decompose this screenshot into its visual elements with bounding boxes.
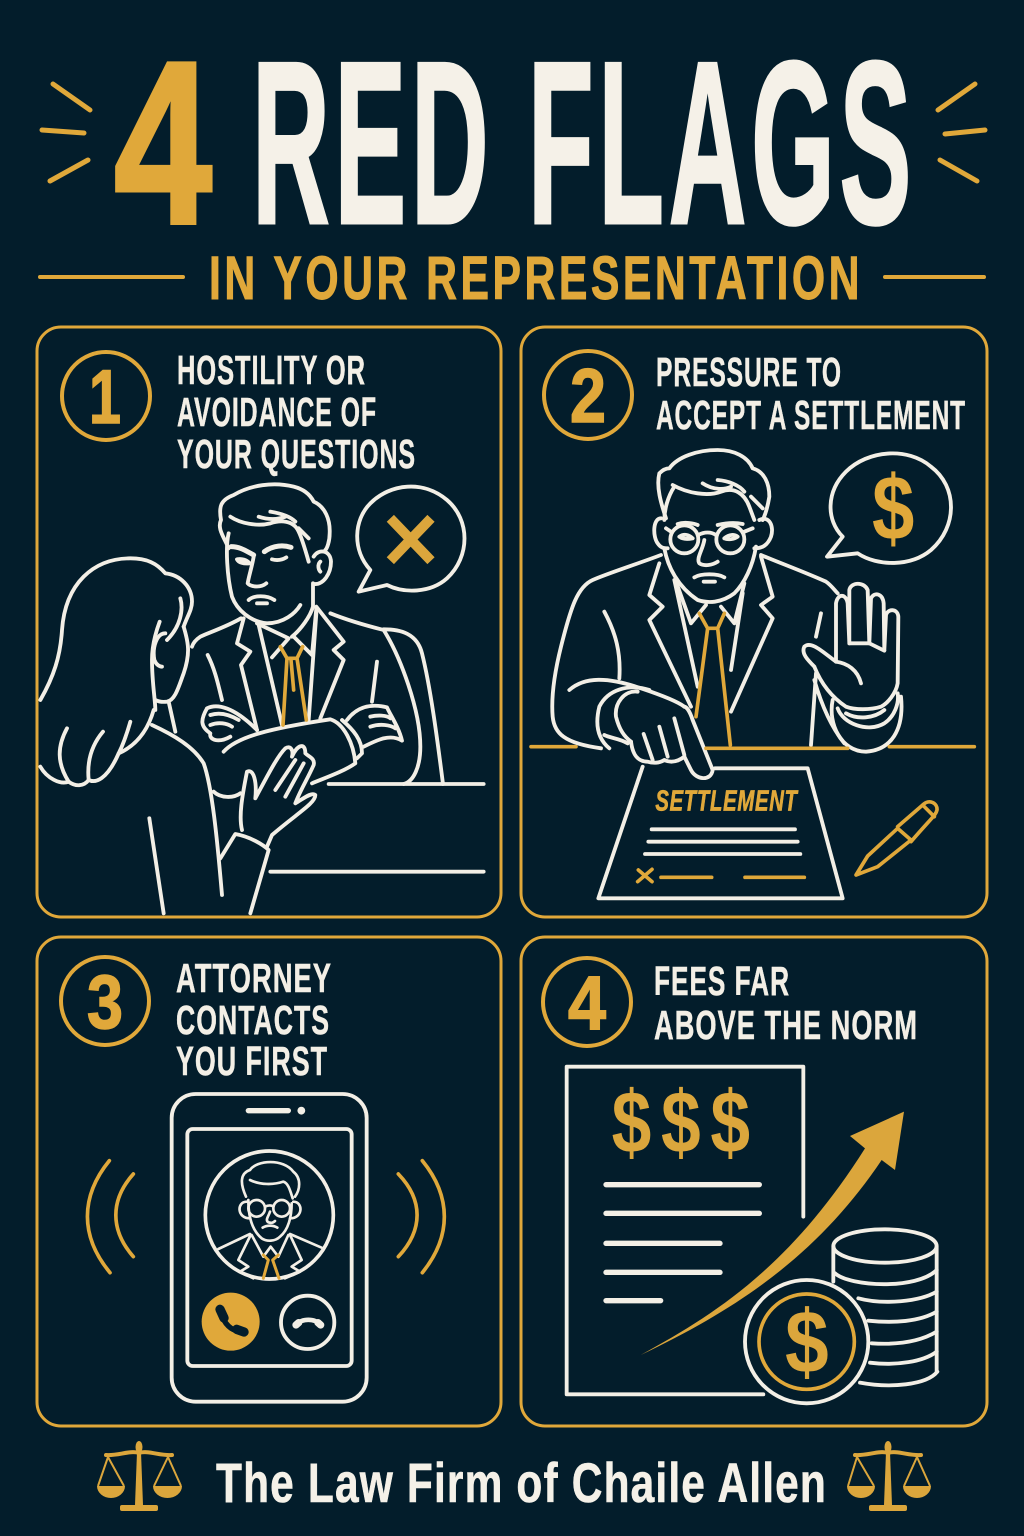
- number badge 3: [61, 957, 149, 1045]
- heading 2: [656, 349, 966, 438]
- number badge 2: [544, 351, 632, 439]
- heading 3: YOU FIRST: [176, 1038, 328, 1084]
- number badge 3: 3: [87, 960, 123, 1045]
- heading 3: CONTACTS: [176, 997, 330, 1043]
- speech bubble with X: [357, 487, 464, 592]
- caller portrait: [205, 1151, 333, 1279]
- coin: $: [785, 1291, 829, 1391]
- illustration: attorney and client: [40, 484, 484, 913]
- answer button: [202, 1293, 260, 1351]
- heading 4: [654, 958, 918, 1048]
- icon: pen: [856, 802, 937, 875]
- attorney figure: [192, 484, 484, 872]
- heading 3: [176, 955, 332, 1084]
- invoice document: $: [710, 1072, 750, 1171]
- number badge 4: 4: [568, 961, 606, 1046]
- decline button: [281, 1296, 334, 1349]
- number badge 1: 1: [89, 355, 121, 440]
- settlement document: SETTLEMENT: [655, 786, 799, 818]
- panel: fees far above the norm: [521, 937, 987, 1426]
- heading 4: FEES FAR: [654, 958, 790, 1004]
- footer: [97, 1441, 931, 1514]
- tie: [280, 647, 306, 725]
- icon: left rays: [42, 84, 90, 181]
- number badge 1: [62, 352, 150, 440]
- heading 1: AVOIDANCE OF: [177, 389, 377, 435]
- number badge 4: [543, 958, 631, 1046]
- speech bubble with dollar: [827, 453, 951, 563]
- attorney figure: [552, 450, 902, 778]
- coin: [745, 1280, 868, 1403]
- icon: right scales: [847, 1441, 931, 1511]
- icon: left scales: [97, 1441, 182, 1511]
- heading 1: [177, 347, 416, 477]
- heading 1: YOUR QUESTIONS: [177, 431, 416, 477]
- rising arrow: [641, 1112, 904, 1355]
- client figure: [40, 558, 315, 913]
- heading 1: HOSTILITY OR: [177, 347, 366, 393]
- illustration: attorney pointing at settlement: [531, 450, 974, 898]
- desk line: [531, 747, 974, 748]
- heading 2: PRESSURE TO: [656, 349, 842, 395]
- invoice document: [567, 1067, 803, 1394]
- firm name: The Law Firm of Chaile Allen: [216, 1451, 827, 1514]
- invoice document: $: [612, 1072, 651, 1171]
- panel: pressure to settle: [521, 327, 987, 917]
- illustration: fees: [567, 1067, 937, 1403]
- signal waves: [87, 1161, 444, 1273]
- invoice document: $: [661, 1072, 701, 1171]
- panel: hostility or avoidance: [37, 327, 501, 917]
- number badge 2: 2: [570, 354, 606, 439]
- panel: attorney contacts you first: [37, 937, 501, 1426]
- illustration: ringing phone: [87, 1094, 444, 1402]
- heading 3: ATTORNEY: [176, 955, 332, 1001]
- icon: right rays: [938, 84, 985, 181]
- speech bubble with dollar: $: [872, 458, 914, 560]
- phone body: [172, 1094, 367, 1402]
- title: 4: [114, 14, 212, 273]
- settlement document: [598, 767, 843, 898]
- tie: [696, 613, 730, 745]
- coin stack: [833, 1229, 937, 1385]
